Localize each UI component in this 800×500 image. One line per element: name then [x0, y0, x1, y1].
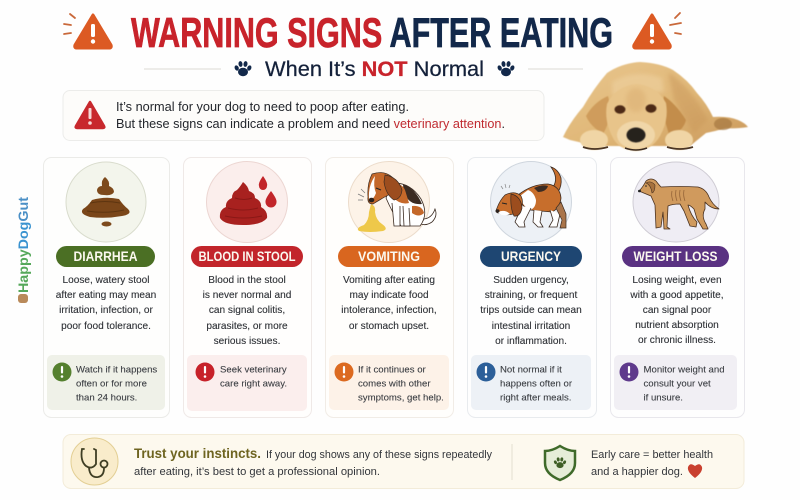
- left ear: [586, 96, 611, 134]
- early care text: and a happier dog.: [591, 466, 683, 478]
- callout: care right away.: [220, 378, 287, 390]
- callout: [614, 355, 737, 410]
- callout: often or for more: [76, 378, 147, 390]
- icon: paw shield: [545, 446, 575, 480]
- body: [563, 62, 748, 146]
- right ear: [662, 96, 686, 137]
- icon: stethoscope: [71, 438, 118, 485]
- legs: [515, 206, 560, 227]
- callout: Seek veterinary: [220, 364, 287, 376]
- description: can signal colitis,: [209, 305, 285, 316]
- head: [368, 173, 394, 204]
- description: with a good appetite,: [629, 290, 724, 301]
- description: serious issues.: [214, 336, 280, 347]
- description: is never normal and: [203, 290, 291, 301]
- callout: if unsure.: [644, 392, 683, 404]
- description: can signal poor: [643, 305, 712, 316]
- description: Losing weight, even: [632, 275, 722, 286]
- icon: bloody stool: [206, 162, 288, 242]
- label pill: WEIGHT LOSS: [634, 248, 718, 264]
- alert text: [116, 99, 505, 131]
- label pill: [622, 246, 729, 267]
- callout: right after meals.: [500, 392, 571, 404]
- panel: urgency: [468, 158, 596, 418]
- head: [606, 84, 667, 151]
- description: nutrient absorption: [635, 320, 719, 331]
- icon: right warning triangle: [634, 13, 681, 48]
- callout: Monitor weight and: [644, 364, 725, 376]
- legs: [392, 203, 410, 226]
- nose: [626, 128, 646, 142]
- tail: [421, 209, 436, 225]
- callout: Watch if it happens: [76, 364, 157, 376]
- description: or inflammation.: [495, 336, 567, 347]
- icon: left warning triangle: [64, 14, 111, 48]
- alert text: But these signs can indicate a problem and need veterinary attention.: [116, 116, 505, 131]
- callout: consult your vet: [644, 378, 711, 390]
- paws: [580, 130, 608, 150]
- callout: If it continues or: [358, 364, 427, 376]
- panel: diarrhea: [44, 158, 170, 418]
- callout: [187, 355, 307, 411]
- callout: Not normal if it: [500, 364, 562, 376]
- description: Sudden urgency,: [493, 275, 569, 286]
- description: parasites, or more: [206, 321, 288, 332]
- description: or stomach upset.: [349, 321, 429, 332]
- label pill: [191, 246, 303, 267]
- description: Vomiting after eating: [343, 275, 435, 286]
- description: intestinal irritation: [492, 321, 570, 332]
- icon: red warning triangle: [76, 102, 104, 128]
- subtitle: [144, 57, 583, 81]
- panel: blood in stool: [184, 158, 312, 418]
- alert text: It’s normal for your dog to need to poop after eating.: [116, 99, 409, 114]
- description: [629, 275, 724, 346]
- callout: happens often or: [500, 378, 573, 390]
- description: Loose, watery stool: [63, 275, 149, 286]
- heading text: WARNING SIGNS AFTER EATING: [131, 9, 613, 56]
- description: may indicate food: [349, 290, 429, 301]
- head: [496, 193, 522, 215]
- callout: comes with other: [358, 378, 431, 390]
- callout: [47, 355, 165, 410]
- callout: [471, 355, 591, 410]
- description: after eating may mean: [56, 290, 156, 301]
- icon: right paw: [497, 61, 515, 76]
- back leg and tail: [714, 118, 732, 130]
- icon: vomiting dog: [348, 162, 436, 242]
- description: irritation, infection, or: [59, 305, 153, 316]
- description: [203, 275, 291, 347]
- description: [341, 275, 437, 332]
- banner text: after eating, it’s best to get a professional opinion.: [134, 466, 380, 478]
- label pill: [56, 246, 155, 267]
- title: [64, 9, 681, 56]
- description: intolerance, infection,: [341, 305, 437, 316]
- label pill: DIARRHEA: [74, 248, 138, 264]
- callout: symptoms, get help.: [358, 392, 444, 404]
- early care text: Early care = better health: [591, 449, 713, 461]
- label pill: VOMITING: [358, 248, 420, 264]
- banner text: Trust your instincts.: [134, 445, 261, 461]
- icon: left paw: [234, 61, 252, 76]
- label pill: URGENCY: [501, 248, 562, 264]
- eyes: [614, 105, 626, 114]
- tail: [551, 167, 561, 192]
- icon: golden retriever lying down: [563, 62, 748, 151]
- label pill: [338, 246, 440, 267]
- early care text: [591, 449, 713, 478]
- description: [56, 275, 156, 332]
- label pill: [480, 246, 582, 267]
- panel: vomiting: [326, 158, 454, 418]
- description: Blood in the stool: [208, 275, 286, 286]
- description: straining, or frequent: [485, 290, 577, 301]
- banner text: If your dog shows any of these signs repeatedly: [266, 449, 492, 461]
- description: poor food tolerance.: [61, 321, 151, 332]
- panel: weight loss: [610, 158, 744, 418]
- banner text: [134, 445, 492, 478]
- subtitle text: When It’s NOT Normal: [265, 57, 484, 81]
- callout: [329, 355, 449, 410]
- description: [480, 275, 582, 347]
- description: or chronic illness.: [638, 335, 716, 346]
- description: trips outside can mean: [480, 305, 582, 316]
- body: [518, 184, 561, 212]
- brand logo: HappyDogGut: [16, 196, 31, 293]
- icon: thin dog: [633, 162, 719, 242]
- label pill: BLOOD IN STOOL: [198, 248, 296, 264]
- icon: heart: [688, 464, 702, 478]
- icon: diarrhea stool: [66, 162, 146, 242]
- panel: intro alert: [63, 90, 544, 140]
- vomit: [358, 204, 386, 232]
- callout: than 24 hours.: [76, 392, 137, 404]
- icon: brand dog: [18, 294, 28, 303]
- panel: bottom banner: [63, 434, 744, 488]
- body: [386, 183, 425, 226]
- icon: straining dog: [490, 162, 572, 242]
